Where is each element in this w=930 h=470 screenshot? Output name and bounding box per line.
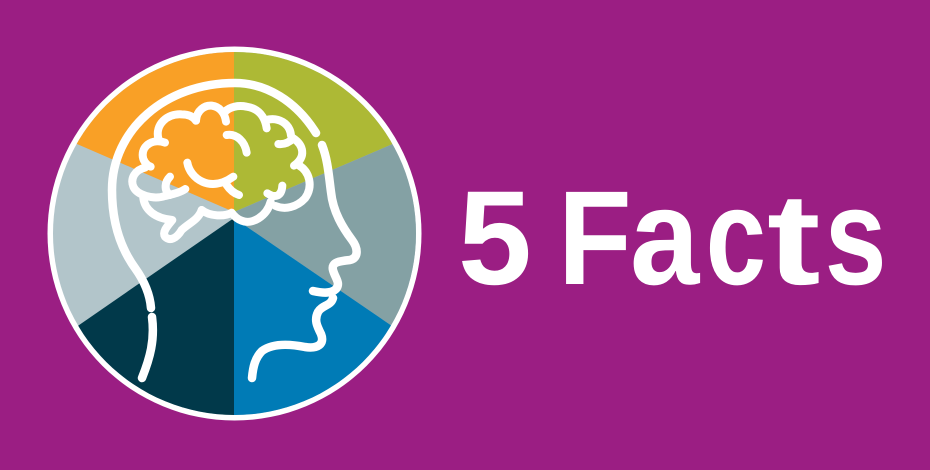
title: c <box>706 161 766 314</box>
infographic canvas <box>48 46 882 420</box>
title: a <box>630 159 700 313</box>
title: 5 <box>458 163 532 313</box>
title: s <box>825 160 887 314</box>
title: F <box>558 164 632 313</box>
circular emblem <box>48 46 422 420</box>
white ring <box>48 46 422 420</box>
title <box>458 159 887 314</box>
icon: head outline <box>112 83 357 378</box>
colored pie segments <box>53 52 416 415</box>
icon: brain <box>132 106 310 239</box>
title: t <box>767 167 821 312</box>
